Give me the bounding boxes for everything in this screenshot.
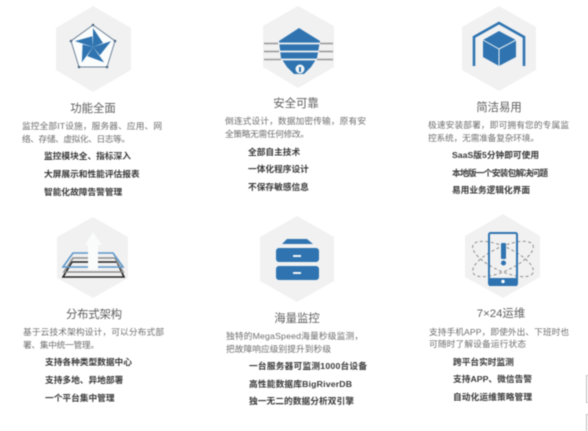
description: 控系统，无需准备复杂环境。	[428, 132, 539, 143]
description: 监控全部IT设施，服务器、应用、网	[22, 120, 162, 131]
icon: phone with alert	[465, 214, 540, 298]
feature list: 本地版一个安装包解决问题	[452, 167, 548, 178]
panel: 7×24运维	[429, 214, 569, 402]
feature list: 支持各种类型数据中心	[45, 356, 132, 367]
description: 络、存储、虚拟化、日志等。	[22, 133, 130, 144]
description: 全策略无需任何修改。	[225, 128, 309, 139]
description	[22, 120, 162, 144]
panel: 海量监控	[226, 216, 370, 411]
feature list: 一台服务器可监测1000台设备	[249, 360, 367, 371]
panel: 功能全面	[22, 6, 162, 197]
feature list: 不保存敏感信息	[248, 181, 309, 192]
feature list: SaaS版5分钟即可使用	[452, 149, 539, 160]
description: 独特的MegaSpeed海量秒级监测，	[226, 330, 363, 341]
icon: cube in house outline	[462, 6, 536, 91]
panel: 安全可靠	[225, 6, 366, 192]
feature list	[44, 150, 140, 197]
edge boxes at right margin	[586, 376, 588, 431]
description: 把故障响应级别提升到秒级	[226, 343, 331, 354]
feature list: 跨平台实时监测	[453, 356, 514, 367]
heading: 分布式架构	[66, 307, 122, 321]
feature list: 监控模块全、指标深入	[44, 150, 131, 161]
feature list: 支持APP、微信告警	[453, 373, 532, 384]
feature list	[452, 149, 548, 195]
feature list: 全部自主技术	[248, 146, 300, 157]
description	[225, 115, 366, 139]
feature list: 大屏展示和性能评估报表	[44, 168, 140, 179]
feature list	[453, 356, 532, 402]
feature list: 独一无二的数据分析双引擎	[249, 395, 354, 406]
feature list: 自动化运维策略管理	[453, 391, 532, 402]
feature list	[249, 360, 367, 406]
heading: 安全可靠	[273, 96, 319, 110]
icon: shield with lock	[263, 6, 334, 88]
icon: server drawers	[260, 216, 334, 302]
feature list: 高性能数据库BigRiverDB	[249, 378, 352, 389]
description	[428, 119, 569, 143]
heading: 简洁易用	[476, 100, 522, 114]
description	[23, 326, 164, 350]
description: 支持手机APP，即使外出、下班时也	[429, 326, 569, 337]
feature list	[45, 356, 132, 403]
heading: 功能全面	[70, 101, 116, 115]
description	[226, 330, 363, 354]
icon: stacked layers with up arrow	[57, 217, 128, 298]
heading: 海量监控	[274, 311, 320, 325]
icon: pinwheel star in pentagon	[56, 6, 131, 92]
feature list	[248, 146, 309, 192]
heading: 7×24运维	[477, 307, 525, 320]
feature list: 一个平台集中管理	[45, 392, 115, 403]
description	[429, 326, 569, 349]
description: 可随时了解设备运行状态	[429, 338, 526, 349]
description: 倒连式设计，数据加密传输，原有安	[225, 115, 366, 126]
description: 极速安装部署，即可拥有您的专属监	[428, 119, 569, 130]
feature list: 支持多地、异地部署	[45, 374, 124, 385]
description: 署、集中统一管理。	[23, 339, 99, 350]
panel: 分布式架构	[23, 217, 164, 403]
feature list: 智能化故障告警管理	[44, 186, 122, 197]
feature list: 一体化程序设计	[248, 163, 309, 174]
description: 基于云技术架构设计，可以分布式部	[23, 326, 164, 337]
panel: 简洁易用	[428, 6, 569, 195]
feature list: 易用业务逻辑化界面	[452, 184, 530, 195]
